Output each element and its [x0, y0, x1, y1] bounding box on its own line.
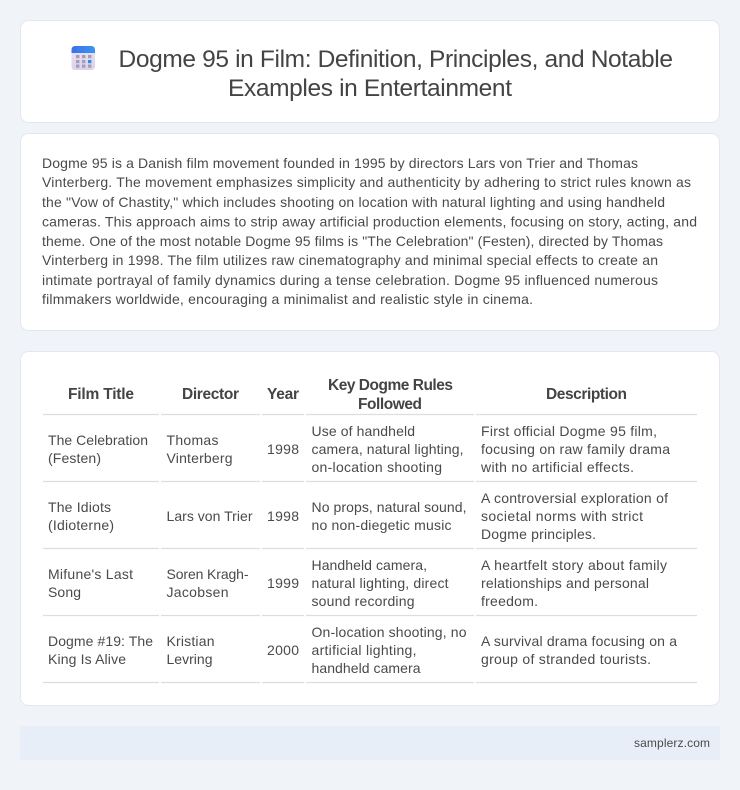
row: Mifune's Last Song: Soren Kragh- — [166, 566, 249, 582]
row: The Celebration: with no artificial effects. — [480, 459, 634, 475]
row: The Idiots: 1998 — [267, 508, 299, 524]
text block: definition paragraph: Vinterberg in 1998. The film utilizes raw cinematography and minimal special effects to create an — [42, 252, 658, 268]
row: Dogme #19: artificial lighting, — [312, 642, 416, 658]
row: Mifune's Last Song: Jacobsen — [166, 584, 228, 600]
row: Mifune's Last Song: Mifune's Last — [48, 566, 133, 582]
row: The Idiots: Lars von Trier — [166, 508, 253, 524]
row: The Idiots: Dogme principles. — [481, 526, 596, 542]
text block: definition paragraph: Vinterberg. The movement emphasizes simplicity and authenticity by adhering to strict rules known as — [42, 174, 691, 190]
row: Dogme #19: A survival drama focusing on a — [481, 633, 677, 649]
row: Dogme #19: handheld camera — [312, 660, 421, 676]
table header: Followed — [358, 396, 422, 413]
title: Examples in Entertainment — [228, 75, 512, 102]
table header: Director — [182, 386, 239, 403]
table header: Film Title — [68, 386, 134, 403]
row: Dogme #19 — [48, 624, 677, 676]
row: Dogme #19: 2000 — [267, 642, 299, 658]
row: The Celebration: 1998 — [267, 441, 299, 457]
row: The Idiots: No props, natural sound, — [312, 499, 466, 515]
row: The Celebration: The Celebration — [48, 432, 148, 448]
row: Dogme #19: Levring — [166, 651, 212, 667]
row: The Idiots: societal norms with strict — [481, 508, 643, 524]
row: The Celebration: First official Dogme 95 film, — [481, 423, 657, 439]
panel: film table — [20, 352, 720, 706]
row: The Idiots — [48, 490, 668, 542]
row: The Celebration: Vinterberg — [166, 450, 232, 466]
footer: samplerz.com — [634, 736, 710, 750]
row: Mifune's Last Song: freedom. — [481, 593, 538, 609]
panel: definition text — [20, 134, 720, 330]
table header: Description — [546, 386, 627, 403]
row: Dogme #19: Dogme #19: The — [48, 633, 153, 649]
row: Mifune's Last Song: sound recording — [312, 593, 414, 609]
row: Mifune's Last Song: Handheld camera, — [312, 557, 427, 573]
text block: definition paragraph: intimate portrayal of family dynamics during a tense celebration. Dogme 95 influenced numerous — [42, 272, 658, 288]
text block: definition paragraph: Dogme 95 is a Danish film movement founded in 1995 by directors Lars von Trier and Thomas — [42, 155, 638, 171]
text block: definition paragraph: cameras. This approach aims to strip away artificial production elements, focusing on story, acting, and — [42, 214, 697, 230]
row: Mifune's Last Song: relationships and personal — [481, 575, 649, 591]
row: The Celebration: camera, natural lighting, — [312, 441, 464, 457]
footer — [20, 726, 720, 760]
row: The Idiots: no non-diegetic music — [312, 517, 452, 533]
table rules — [43, 414, 697, 682]
title: Dogme 95 in Film: Definition, Principles, and Notable — [118, 46, 673, 73]
table header: Year — [267, 386, 299, 403]
row: Dogme #19: group of stranded tourists. — [481, 651, 651, 667]
row: Dogme #19: King Is Alive — [48, 651, 126, 667]
row: Mifune's Last Song: natural lighting, direct — [312, 575, 449, 591]
icon: calendar — [72, 46, 95, 70]
row: The Idiots: The Idiots — [48, 499, 111, 515]
text block: definition paragraph: filmmakers worldwide, encouraging a minimalist and realistic style in cinema. — [42, 291, 533, 307]
row: Mifune's Last Song: Song — [48, 584, 81, 600]
row: The Celebration: Use of handheld — [312, 423, 415, 439]
row: Dogme #19: On-location shooting, no — [312, 624, 467, 640]
row: Mifune's Last Song — [48, 557, 667, 609]
panel: header — [20, 20, 720, 122]
row: The Celebration — [48, 423, 670, 475]
title — [118, 46, 673, 102]
text block: definition paragraph: the "Vow of Chastity," which includes shooting on location with natural lighting and using handheld — [42, 194, 665, 210]
row: Mifune's Last Song: A heartfelt story about family — [481, 557, 667, 573]
row: The Celebration: (Festen) — [48, 450, 101, 466]
row: The Idiots: A controversial exploration of — [481, 490, 668, 506]
row: Dogme #19: Kristian — [166, 633, 214, 649]
row: Mifune's Last Song: 1999 — [267, 575, 299, 591]
row: The Celebration: on-location shooting — [312, 459, 442, 475]
table header: Key Dogme Rules — [328, 377, 453, 394]
row: The Celebration: focusing on raw family drama — [481, 441, 670, 457]
table header — [68, 377, 627, 413]
text block: definition paragraph — [42, 155, 697, 307]
row: The Idiots: (Idioterne) — [48, 517, 114, 533]
text block: definition paragraph: theme. One of the most notable Dogme 95 films is "The Celebration" (Festen), directed by Thomas — [42, 233, 663, 249]
row: The Celebration: Thomas — [166, 432, 218, 448]
